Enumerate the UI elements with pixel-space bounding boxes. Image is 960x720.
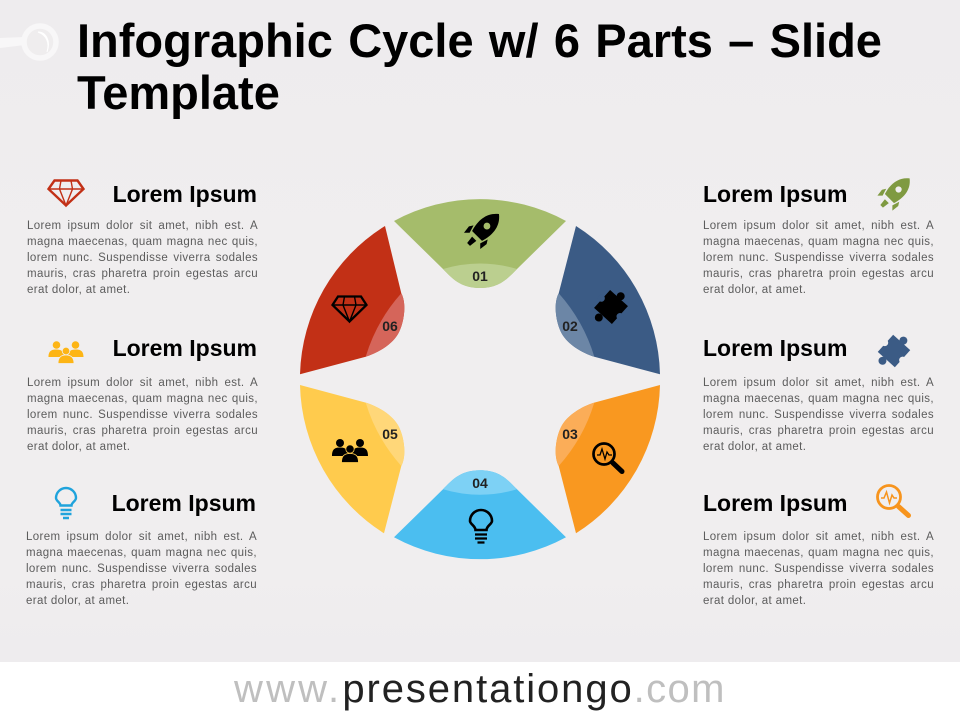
heading: Lorem Ipsum bbox=[113, 335, 257, 361]
body text: magna maecenas, quam magna nec quis, bbox=[27, 393, 258, 405]
footer: website url: www.presentationgo.com bbox=[234, 667, 726, 711]
body text bbox=[703, 220, 934, 296]
panel: right 1 rocket bbox=[703, 178, 934, 296]
body text bbox=[27, 377, 258, 453]
body text: Lorem ipsum dolor sit amet, nibh est. A bbox=[27, 377, 258, 389]
segment 05: yellow people: 05 bbox=[382, 426, 398, 442]
segment 03: orange magnifier bbox=[556, 385, 660, 533]
icon: orange magnifier bbox=[876, 484, 911, 518]
segment 04: cyan bulb bbox=[394, 470, 566, 559]
segment 04: cyan bulb: 04 bbox=[472, 475, 488, 491]
body text: magna maecenas, quam magna nec quis, bbox=[703, 236, 934, 248]
segment 02: blue puzzle: 02 bbox=[562, 318, 578, 334]
segment 05: yellow people bbox=[300, 385, 404, 533]
segment 01: green rocket bbox=[394, 199, 566, 288]
heading: Lorem Ipsum bbox=[112, 490, 256, 516]
title: Infographic Cycle w/ 6 Parts – Slide bbox=[77, 14, 882, 67]
body text: Lorem ipsum dolor sit amet, nibh est. A bbox=[26, 531, 257, 543]
body text: lorem nunc. Suspendisse viverra sodales bbox=[26, 563, 257, 575]
segment 06: red diamond: 06 bbox=[382, 318, 398, 334]
body text bbox=[26, 531, 257, 607]
body text: mauris, cras pharetra proin egestas arcu bbox=[703, 425, 934, 437]
heading: Lorem Ipsum bbox=[113, 181, 257, 207]
body text: Lorem ipsum dolor sit amet, nibh est. A bbox=[27, 220, 258, 232]
title: Template bbox=[77, 66, 280, 118]
segment 01: green rocket: 01 bbox=[472, 268, 488, 284]
icon: red diamond bbox=[47, 179, 85, 208]
body text: mauris, cras pharetra proin egestas arcu bbox=[703, 579, 934, 591]
icon: blue puzzle bbox=[878, 334, 910, 368]
body text: magna maecenas, quam magna nec quis, bbox=[27, 236, 258, 248]
body text: mauris, cras pharetra proin egestas arcu bbox=[27, 425, 258, 437]
body text: erat dolor, at amet. bbox=[27, 284, 130, 296]
panel: left 1 diamond bbox=[27, 179, 258, 296]
body text: erat dolor, at amet. bbox=[703, 595, 806, 607]
segment 03: orange magnifier: 03 bbox=[562, 426, 578, 442]
body text: lorem nunc. Suspendisse viverra sodales bbox=[703, 252, 934, 264]
body text: Lorem ipsum dolor sit amet, nibh est. A bbox=[703, 377, 934, 389]
body text: lorem nunc. Suspendisse viverra sodales bbox=[27, 409, 258, 421]
body text: erat dolor, at amet. bbox=[27, 441, 130, 453]
icon: yellow people bbox=[48, 341, 84, 364]
body text bbox=[703, 377, 934, 453]
icon: green rocket bbox=[878, 178, 910, 210]
heading: Lorem Ipsum bbox=[703, 490, 847, 516]
body text: erat dolor, at amet. bbox=[703, 284, 806, 296]
body text: magna maecenas, quam magna nec quis, bbox=[703, 547, 934, 559]
body text bbox=[703, 531, 934, 607]
body text: mauris, cras pharetra proin egestas arcu bbox=[26, 579, 257, 591]
body text: mauris, cras pharetra proin egestas arcu bbox=[27, 268, 258, 280]
decorative ring with white pin bbox=[0, 24, 58, 60]
body text bbox=[27, 220, 258, 296]
body text: lorem nunc. Suspendisse viverra sodales bbox=[703, 563, 934, 575]
icon: blue bulb bbox=[54, 486, 78, 520]
body text: erat dolor, at amet. bbox=[26, 595, 129, 607]
panel: right 3 magnifier bbox=[703, 484, 934, 607]
footer: website url bbox=[0, 662, 960, 720]
heading: Lorem Ipsum bbox=[703, 335, 847, 361]
body text: Lorem ipsum dolor sit amet, nibh est. A bbox=[703, 531, 934, 543]
body text: erat dolor, at amet. bbox=[703, 441, 806, 453]
segment 02: blue puzzle bbox=[556, 226, 660, 374]
body text: lorem nunc. Suspendisse viverra sodales bbox=[27, 252, 258, 264]
body text: Lorem ipsum dolor sit amet, nibh est. A bbox=[703, 220, 934, 232]
title bbox=[77, 14, 882, 119]
panel: left 2 people bbox=[27, 335, 258, 453]
body text: lorem nunc. Suspendisse viverra sodales bbox=[703, 409, 934, 421]
body text: mauris, cras pharetra proin egestas arcu bbox=[703, 268, 934, 280]
panel: left 3 bulb bbox=[26, 486, 257, 607]
panel: right 2 puzzle bbox=[703, 334, 934, 453]
heading: Lorem Ipsum bbox=[703, 181, 847, 207]
body text: magna maecenas, quam magna nec quis, bbox=[703, 393, 934, 405]
segment 06: red diamond bbox=[300, 226, 404, 374]
body text: magna maecenas, quam magna nec quis, bbox=[26, 547, 257, 559]
